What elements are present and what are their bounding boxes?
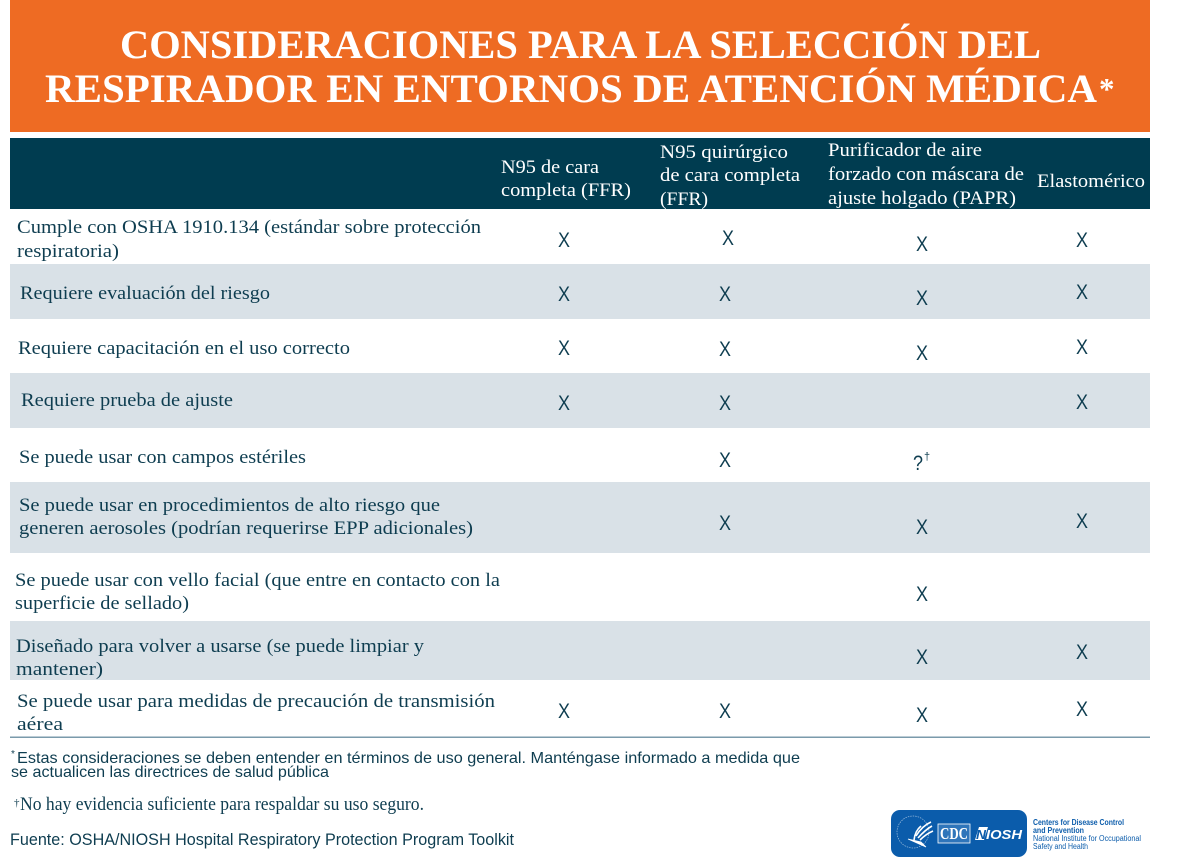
row 5: † bbox=[924, 451, 930, 463]
column heading: PAPR: forzado con máscara de bbox=[828, 164, 1024, 185]
CDC mark: CDC bbox=[940, 824, 968, 843]
row 2 bbox=[20, 281, 1088, 310]
row 6: generen aerosoles (podrían requerirse EPP adicionales) bbox=[19, 518, 473, 539]
column heading: PAPR: Purificador de aire bbox=[828, 140, 982, 161]
row 8: X bbox=[916, 646, 928, 669]
row 8 bbox=[16, 636, 1088, 680]
row 3: X bbox=[1076, 336, 1088, 359]
icon: HHS eagle bbox=[897, 816, 933, 848]
row 2: X bbox=[719, 283, 731, 306]
row 3: X bbox=[558, 337, 570, 360]
row 9: aérea bbox=[17, 714, 64, 735]
row 8: Diseñado para volver a usarse (se puede limpiar y bbox=[16, 636, 425, 657]
agency name: National Institute for Occupational bbox=[1033, 834, 1141, 843]
source: Fuente: OSHA/NIOSH Hospital Respiratory Protection Program Toolkit bbox=[10, 830, 514, 849]
row 1: respiratoria) bbox=[17, 241, 119, 262]
title bbox=[45, 22, 1114, 111]
row 9 bbox=[17, 691, 1088, 735]
row 8: X bbox=[1076, 641, 1088, 664]
row 2: X bbox=[558, 283, 570, 306]
title banner bbox=[10, 0, 1150, 132]
row 4: X bbox=[1076, 391, 1088, 414]
row 5: ? bbox=[913, 452, 923, 475]
footnote: general use: se actualicen las directrices de salud pública bbox=[11, 764, 329, 781]
column heading: PAPR bbox=[828, 140, 1024, 209]
row 7 bbox=[15, 570, 928, 614]
column heading: N95 quirúrgico: de cara completa bbox=[660, 165, 801, 186]
footnote: general use: Estas consideraciones se deben entender en términos de uso general. Manténgase informado a medida que bbox=[17, 750, 800, 767]
row 5: X bbox=[719, 449, 731, 472]
row 4: Requiere prueba de ajuste bbox=[21, 390, 233, 411]
title: CONSIDERACIONES PARA LA SELECCIÓN DEL bbox=[120, 22, 1041, 67]
row 1: X bbox=[1076, 229, 1088, 252]
column heading: PAPR: ajuste holgado (PAPR) bbox=[828, 188, 1016, 209]
footnote: general use: * bbox=[11, 749, 15, 760]
agency name: Safety and Health bbox=[1033, 842, 1088, 851]
column heading: Elastomérico: Elastomérico bbox=[1037, 171, 1145, 192]
row 9: X bbox=[1076, 698, 1088, 721]
row 1: X bbox=[722, 227, 734, 250]
row 3 bbox=[18, 336, 1088, 365]
agency name bbox=[1033, 818, 1141, 851]
row 9: X bbox=[916, 704, 928, 727]
row 6: X bbox=[719, 512, 731, 535]
row 7: X bbox=[916, 583, 928, 606]
row 6 bbox=[19, 495, 1088, 539]
row 3: X bbox=[916, 342, 928, 365]
row 9: Se puede usar para medidas de precaución de transmisión bbox=[17, 691, 496, 712]
footnote: insufficient evidence: † bbox=[14, 797, 20, 809]
row 2: Requiere evaluación del riesgo bbox=[20, 283, 270, 304]
agency name: Centers for Disease Control bbox=[1033, 818, 1124, 827]
row 2: X bbox=[1076, 281, 1088, 304]
footnote: insufficient evidence: No hay evidencia suficiente para respaldar su uso seguro. bbox=[20, 795, 424, 815]
NIOSH mark: IOSH bbox=[986, 827, 1023, 842]
row 8: mantener) bbox=[16, 659, 103, 680]
row 6: X bbox=[916, 516, 928, 539]
row 6: X bbox=[1076, 510, 1088, 533]
row 7: superficie de sellado) bbox=[15, 593, 189, 614]
row 9: X bbox=[558, 700, 570, 723]
row 3: X bbox=[719, 338, 731, 361]
row 1: Cumple con OSHA 1910.134 (estándar sobre protección bbox=[17, 217, 482, 238]
agency name: and Prevention bbox=[1033, 826, 1084, 835]
table header bbox=[10, 138, 1150, 210]
title: * bbox=[1099, 71, 1114, 106]
title: RESPIRADOR EN ENTORNOS DE ATENCIÓN MÉDICA bbox=[45, 66, 1097, 111]
logo: CDC NIOSH bbox=[891, 810, 1027, 857]
row 4: X bbox=[719, 392, 731, 415]
row bands bbox=[10, 264, 1150, 680]
row 4: X bbox=[558, 392, 570, 415]
row 9: X bbox=[719, 700, 731, 723]
row 1 bbox=[17, 217, 1088, 262]
column heading: N95 quirúrgico: (FFR) bbox=[660, 189, 708, 210]
row 3: Requiere capacitación en el uso correcto bbox=[18, 338, 350, 359]
column heading: N95: N95 de cara bbox=[501, 157, 600, 178]
column heading: N95: completa (FFR) bbox=[501, 180, 631, 201]
row 6: Se puede usar en procedimientos de alto riesgo que bbox=[19, 495, 440, 516]
NIOSH mark: N bbox=[976, 827, 987, 842]
row 4 bbox=[21, 390, 1088, 415]
row 7: Se puede usar con vello facial (que entre en contacto con la bbox=[15, 570, 501, 591]
row 1: X bbox=[916, 233, 928, 256]
column heading: N95 quirúrgico: N95 quirúrgico bbox=[660, 142, 788, 163]
row 5: Se puede usar con campos estériles bbox=[19, 447, 306, 468]
column heading: N95 quirúrgico bbox=[660, 142, 801, 210]
NIOSH mark bbox=[975, 827, 1023, 842]
row 2: X bbox=[916, 287, 928, 310]
row 5 bbox=[19, 447, 930, 475]
column heading: N95 bbox=[501, 157, 631, 201]
footnote: general use bbox=[11, 749, 800, 781]
row 1: X bbox=[558, 229, 570, 252]
